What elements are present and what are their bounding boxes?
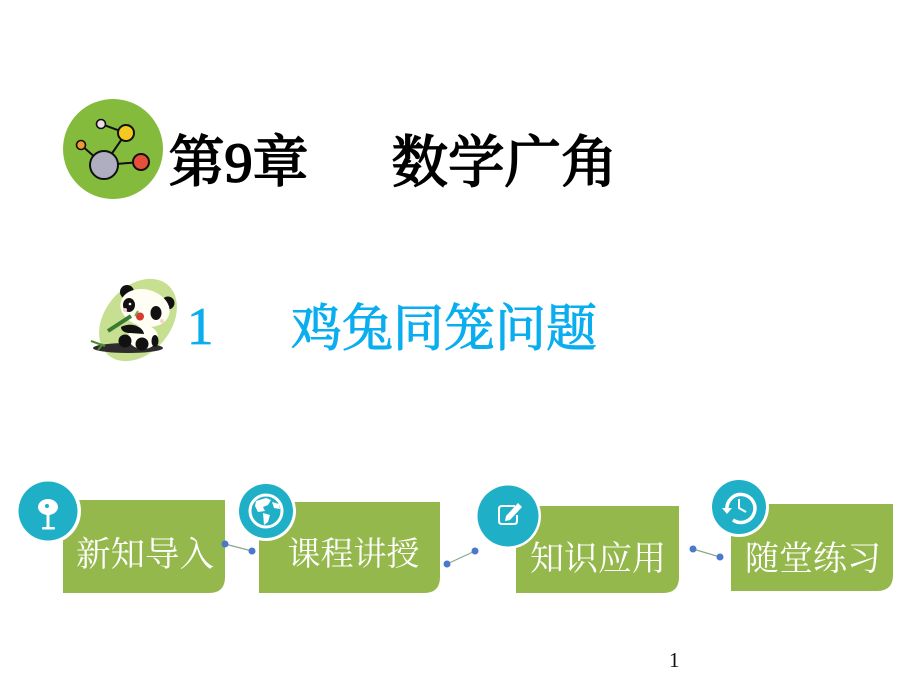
icon: molecule badge [63,99,163,199]
card: 知识应用 [475,483,679,593]
page number: 1 [669,648,680,672]
card: 课程讲授 [236,481,440,593]
icon: clock history [709,477,769,537]
icon: signpost [15,478,81,544]
title: 数学广角 [392,132,618,194]
title [168,132,618,194]
label: 课程讲授 [288,536,420,573]
subtitle: 鸡兔同笼问题 [291,302,597,358]
label: 随堂练习 [745,540,881,578]
connector 3 [690,546,724,560]
title: 第9章 [168,132,308,194]
icon: panda with bamboo [83,264,193,376]
connector 1 [222,540,256,554]
connector 2 [444,548,478,568]
icon: edit [475,483,541,549]
label: 新知导入 [76,536,214,574]
card: 新知导入 [15,478,225,593]
label: 知识应用 [530,540,666,578]
card: 随堂练习 [709,477,893,591]
subtitle [187,298,597,358]
icon: globe [236,481,296,541]
subtitle: 1 [187,298,214,356]
